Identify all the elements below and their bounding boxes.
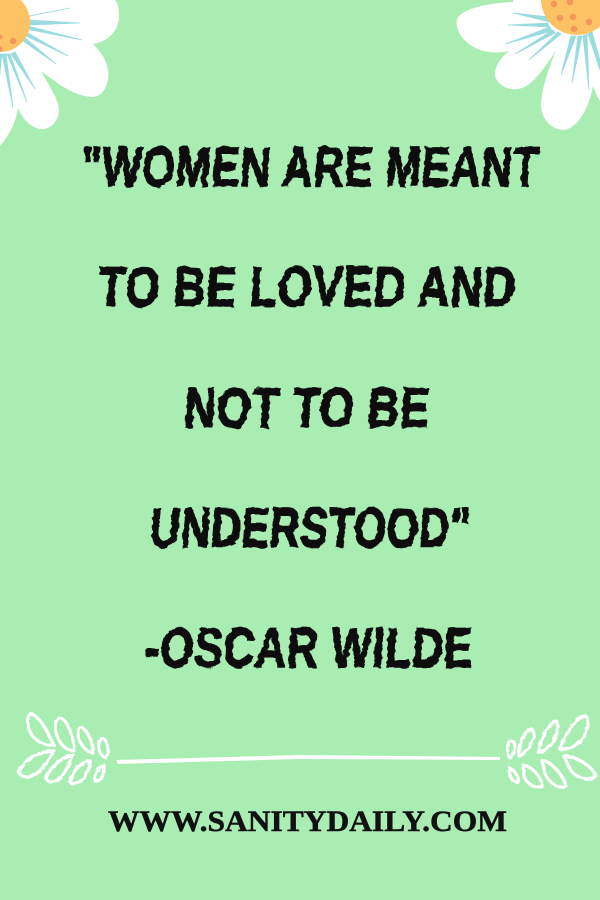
heading: quote text: NOT TO BE [182,376,433,439]
icon: top-left daisy flower [0,0,119,146]
heading: quote text [79,135,542,679]
icon: top-right daisy flower [457,0,600,130]
icon: right white leaf sprig [507,716,596,787]
heading: quote text: UNDERSTOOD" [148,496,473,559]
divider: white brush line [116,755,500,764]
attribution: -OSCAR WILDE [143,616,476,679]
website url: WWW.SANITYDAILY.COM [108,805,507,838]
icon: left white leaf sprig [19,714,108,784]
